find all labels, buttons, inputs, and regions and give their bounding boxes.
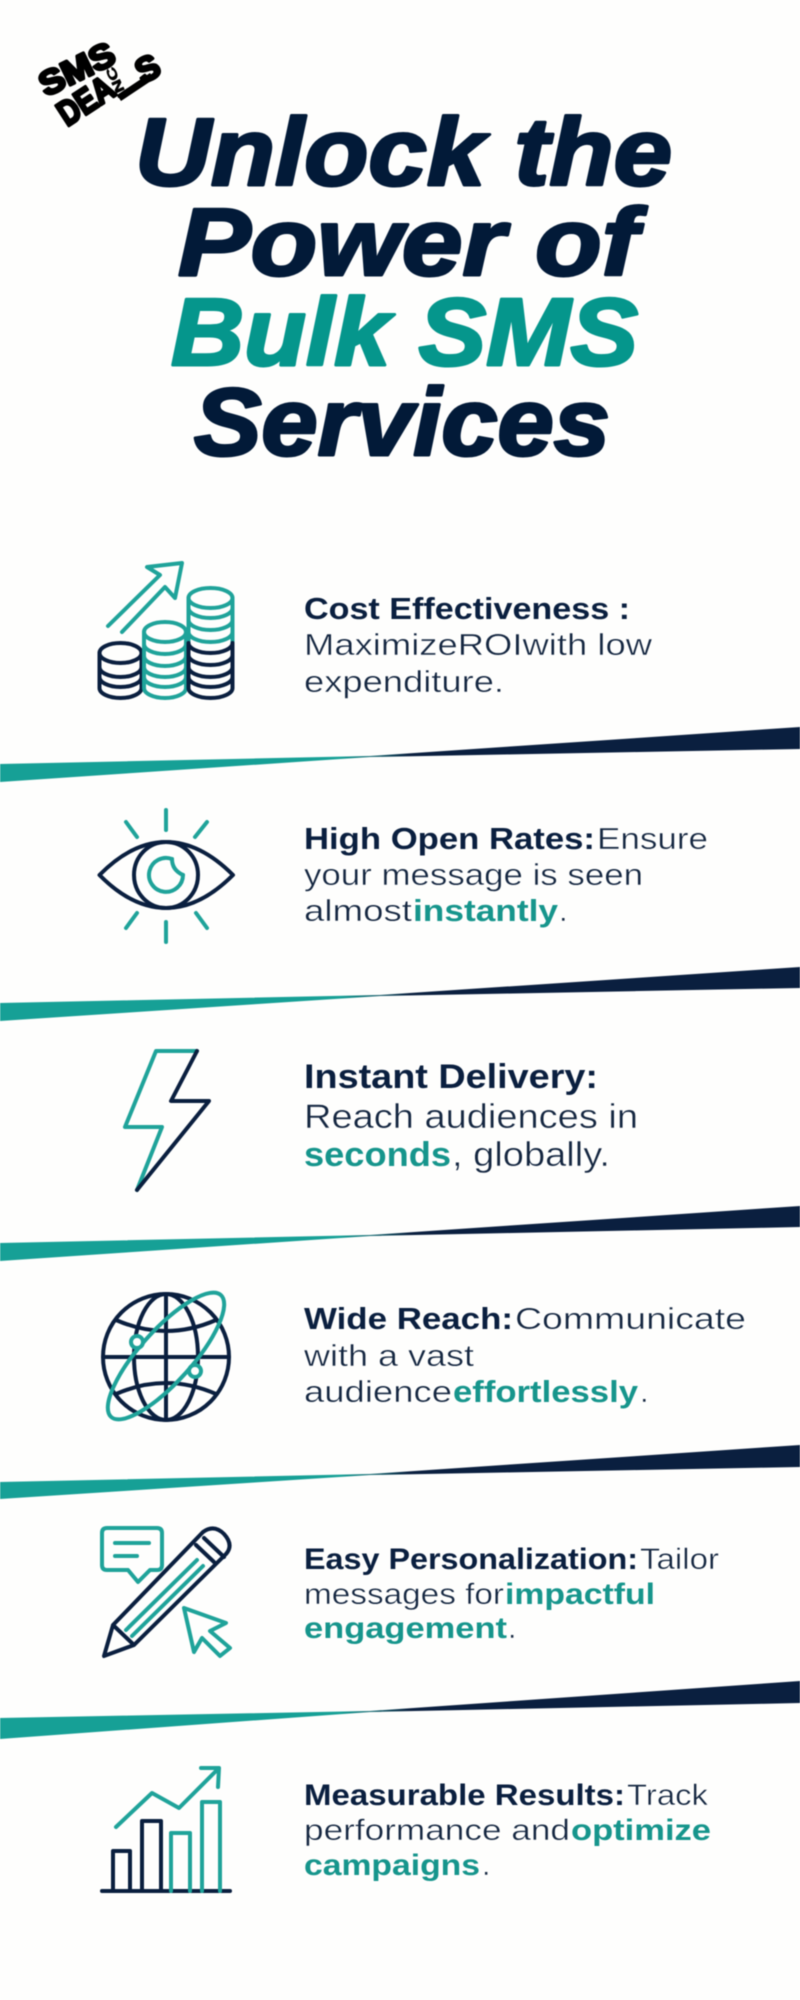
text: easy personalization	[304, 1543, 719, 1645]
text: measurable results	[304, 1779, 711, 1882]
text: high open rates: almost	[304, 893, 412, 928]
text: cost effectiveness	[304, 591, 653, 699]
text: high open rates: High Open Rates:	[304, 821, 595, 856]
text: high open rates: .	[559, 893, 568, 928]
panel: easy personalization	[102, 1528, 719, 1656]
text: easy personalization: .	[508, 1612, 516, 1645]
panel: measurable results	[102, 1768, 711, 1891]
panel: wide reach	[92, 1278, 746, 1434]
panel: high open rates	[100, 810, 708, 942]
text: measurable results: Track	[627, 1779, 709, 1812]
text: measurable results: campaigns	[304, 1849, 480, 1882]
divider 4	[0, 1445, 800, 1499]
text: measurable results: .	[482, 1849, 490, 1882]
icon: pencil with speech bubble and cursor	[102, 1528, 230, 1656]
logo: SMS Deals Inc: S	[129, 47, 167, 91]
text: instant delivery: seconds	[304, 1136, 451, 1174]
icon: eye	[100, 810, 233, 942]
divider 5	[0, 1681, 800, 1739]
text: easy personalization: Easy Personalization:	[304, 1543, 638, 1576]
text: instant delivery	[304, 1058, 638, 1174]
panel: cost effectiveness	[100, 563, 653, 699]
text: cost effectiveness: expenditure.	[304, 664, 504, 699]
text: wide reach: with a vast	[303, 1338, 474, 1373]
title: Bulk SMS	[171, 279, 638, 386]
logo: SMS Deals Inc: INC	[102, 64, 130, 100]
text: cost effectiveness: Cost Effectiveness :	[304, 591, 630, 626]
text: wide reach: audience	[304, 1374, 452, 1409]
title: Power of	[178, 189, 647, 296]
divider 2	[0, 967, 800, 1021]
title: Unlock the	[135, 99, 672, 206]
text: wide reach: effortlessly	[453, 1374, 639, 1409]
icon: bar chart with rising arrow	[102, 1768, 230, 1891]
title: Services	[194, 369, 610, 476]
text: easy personalization: Tailor	[640, 1543, 719, 1576]
text: easy personalization: messages for	[304, 1578, 504, 1611]
text: easy personalization: impactful	[505, 1578, 655, 1611]
text: high open rates	[304, 821, 708, 928]
title	[135, 99, 672, 476]
text: instant delivery: , globally.	[452, 1136, 610, 1174]
text: measurable results: Measurable Results:	[304, 1779, 625, 1812]
text: easy personalization: engagement	[304, 1612, 507, 1645]
icon: lightning bolt	[125, 1051, 209, 1190]
text: measurable results: performance and	[304, 1814, 570, 1847]
panel: instant delivery	[125, 1051, 638, 1190]
text: wide reach: Wide Reach:	[304, 1301, 513, 1336]
logo: SMS Deals Inc: SMS	[33, 35, 121, 104]
divider 1	[0, 727, 800, 782]
text: wide reach	[303, 1301, 746, 1409]
text: wide reach: Communicate	[515, 1301, 746, 1336]
text: instant delivery: Instant Delivery:	[304, 1058, 598, 1096]
icon: coins with rising arrow	[100, 563, 232, 698]
logo: SMS Deals Inc: DEA	[50, 68, 122, 134]
divider 3	[0, 1206, 800, 1261]
text: cost effectiveness: MaximizeROIwith low	[304, 627, 653, 662]
text: high open rates: your message is seen	[304, 857, 643, 892]
text: instant delivery: Reach audiences in	[304, 1098, 638, 1136]
text: high open rates: Ensure	[597, 821, 708, 856]
text: measurable results: optimize	[571, 1814, 711, 1847]
text: wide reach: .	[640, 1374, 649, 1409]
logo: SMS Deals Inc	[33, 35, 167, 134]
text: high open rates: instantly	[413, 893, 559, 928]
icon: globe with orbit	[92, 1278, 240, 1434]
